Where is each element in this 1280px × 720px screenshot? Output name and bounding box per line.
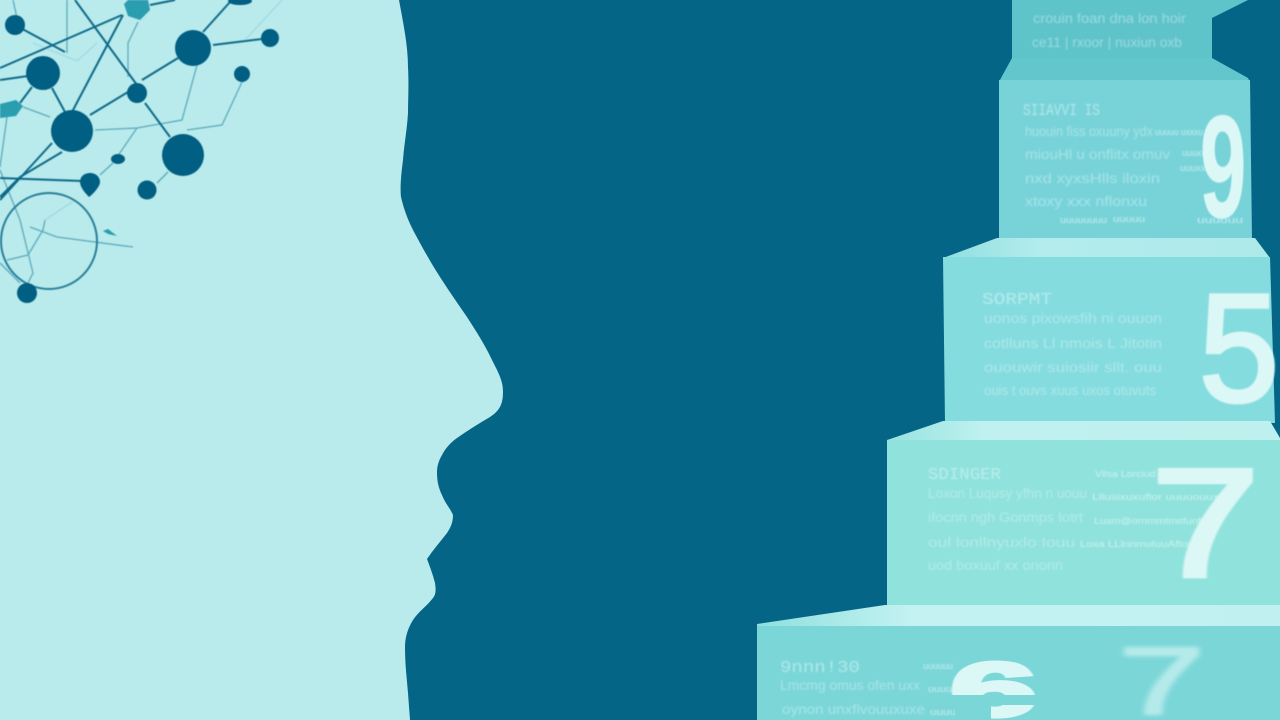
tier 2: step with number <box>999 80 1252 249</box>
tier 3: step with number 5 <box>943 238 1279 434</box>
tier 5: bottom step <box>757 605 1280 720</box>
nodes <box>5 0 279 303</box>
teal nodes <box>0 0 150 236</box>
tier 2 text: uuuuu uxxxu <box>1155 127 1203 137</box>
tier 5 text <box>780 661 999 717</box>
tier 4: step with number 7 <box>887 421 1280 609</box>
tier 4 text: Lusm@ornmmtmsfunfm <box>1094 516 1210 526</box>
tier 2 text <box>1025 124 1243 225</box>
tier 4 text: Loxon Luqusy yfhn n uouu <box>928 486 1087 501</box>
neural network graphic <box>0 0 282 303</box>
tier 5 text: oynon unxflvouuxuxe <box>782 702 925 717</box>
head silhouette profile <box>0 0 503 720</box>
tier 4 text: uod boxuuf xx ononn <box>928 558 1063 573</box>
tier 2 text: uuuxxx <box>1182 148 1210 158</box>
tier 3 text <box>984 311 1162 398</box>
tier 3 text: uonos pixowsfih ni ouuon <box>984 311 1162 326</box>
tier 1 text: ce11 | rxoor | nuxiun oxb <box>1032 35 1182 50</box>
tier 1 text <box>1032 11 1187 50</box>
tier 5 text: Lmcmg omus ofen uxx <box>780 678 920 693</box>
tier 4 text: ifocnn ngh Gonmps Iotrt <box>928 510 1083 525</box>
tier 4 text: oul lonllnyuxlo Iouu <box>928 535 1075 550</box>
tier 1: top step <box>999 0 1250 82</box>
tier 5 heading: 9nnn!30 <box>780 659 860 678</box>
tier 3 number: 5 <box>1199 262 1279 434</box>
tier 1 text: crouin foan dna lon hoir <box>1033 11 1187 26</box>
tier 2 text: uuuxxxxx <box>1180 163 1221 173</box>
tier 5 numbers <box>940 627 1205 720</box>
tier 3 text: ouis t ouvs xuus uxos otuvuts <box>984 383 1156 398</box>
tier 3 text: cotlluns Ll nmois L Jitotin <box>984 336 1162 351</box>
ring <box>1 193 97 289</box>
tier 5 text: uuuuuu <box>923 661 953 671</box>
tier 5 text: uuuuxulxuu <box>930 707 990 717</box>
tier 4 text: Lllusixuxuflor uuuuouuxx <box>1092 492 1226 502</box>
tier 2 text: nxd xyxsHlls iloxin <box>1025 171 1160 186</box>
tier 4 text: Vllsa Lorciud A <box>1095 469 1165 479</box>
tier 4 text: Loxa LLlnnmutuuAflonn <box>1080 539 1200 549</box>
tier 2 text: uuuuu <box>1113 214 1145 224</box>
tier 2 text: miouHl u onflitx omuv <box>1025 147 1170 162</box>
tier 3 heading: SORPMT <box>982 291 1052 310</box>
tier 4 heading: SDINGER <box>928 466 1001 485</box>
tier 2 number: 9 <box>1200 87 1246 249</box>
tier 2 text: xtoxy xxx nflonxu <box>1025 194 1147 209</box>
tier 2 text: uuuuuu <box>1197 215 1243 225</box>
tier 5 text: uuuuuuxuuxxx <box>928 684 999 694</box>
tier 2 heading: SIIAVVI IS <box>1023 102 1100 121</box>
tier 2 text: huouin fiss oxuuny ydx <box>1025 124 1153 139</box>
tier 4 text <box>928 469 1226 573</box>
tier 2 text: uuuuuuuu <box>1060 215 1107 225</box>
tier 4 number: 7 <box>1151 438 1260 609</box>
tier 3 text: ououwir suiosiir sllt. ouu <box>984 360 1162 375</box>
